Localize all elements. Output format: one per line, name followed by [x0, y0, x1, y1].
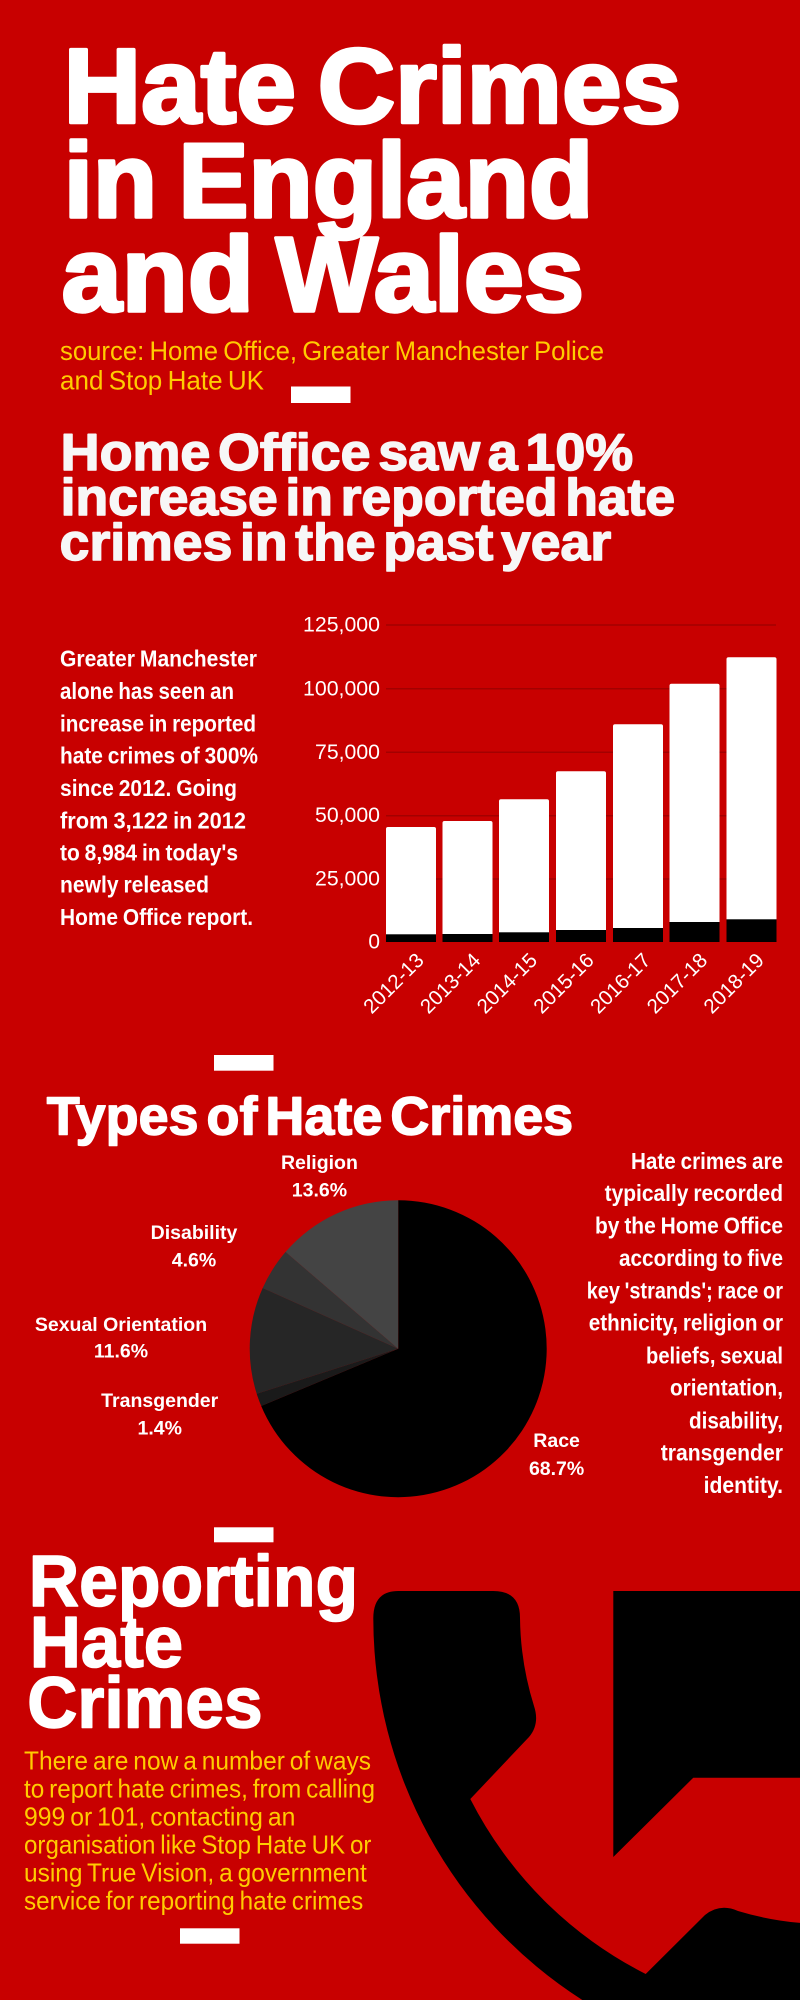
heading: reporting hate crimes	[27, 1542, 358, 1743]
pie labels: Sexual Orientation	[35, 1314, 207, 1336]
text block: greater manchester	[60, 646, 258, 930]
text block: ways to report: to report hate crimes, from calling	[24, 1773, 375, 1803]
text block: strands: disability,	[689, 1407, 783, 1433]
icon: speech bubble	[613, 1591, 800, 1857]
text block: strands	[587, 1148, 783, 1498]
slice: sexual orientation	[250, 1288, 398, 1394]
title: Hate Crimes	[64, 28, 681, 146]
slice: transgender	[257, 1349, 398, 1406]
x axis labels: 2012-13	[359, 949, 429, 1018]
text block: greater manchester: alone has seen an	[60, 678, 234, 704]
text block: greater manchester: to 8,984 in today's	[60, 840, 238, 866]
slice: race	[261, 1200, 547, 1497]
text block: ways to report	[24, 1745, 375, 1915]
x axis labels: 2015-16	[529, 949, 599, 1018]
pie labels: 13.6%	[292, 1180, 347, 1202]
y axis labels: 50,000	[315, 804, 380, 827]
heading: reporting hate crimes: Reporting	[29, 1542, 358, 1622]
pie chart	[250, 1200, 547, 1497]
text block: greater manchester: newly released	[60, 872, 209, 898]
text block: strands: typically recorded	[605, 1180, 783, 1206]
title	[62, 28, 681, 334]
black bar segments	[386, 919, 776, 942]
text block: ways to report: service for reporting hate crimes	[24, 1885, 363, 1915]
heading: reporting hate crimes: Hate	[30, 1603, 183, 1683]
text block: ways to report: There are now a number of ways	[24, 1745, 371, 1775]
y axis labels: 25,000	[315, 867, 380, 890]
slice: disability	[263, 1252, 398, 1349]
heading: reporting hate crimes: Crimes	[27, 1663, 263, 1743]
text block: strands: ethnicity, religion or	[589, 1310, 783, 1336]
text block: strands: transgender	[661, 1440, 783, 1466]
text block: ways to report: 999 or 101, contacting an	[24, 1801, 295, 1831]
x axis labels: 2016-17	[586, 949, 655, 1018]
heading: home office increase: crimes in the past year	[60, 514, 611, 572]
title: and Wales	[62, 216, 584, 334]
x axis labels: 2017-18	[643, 949, 712, 1018]
text block: strands: beliefs, sexual	[646, 1342, 783, 1368]
text block: ways to report: organisation like Stop Hate UK or	[24, 1829, 372, 1859]
y axis labels: 125,000	[303, 614, 380, 637]
y axis labels: 75,000	[315, 741, 380, 764]
x axis labels: 2014-15	[472, 949, 542, 1018]
pie labels: Disability	[151, 1222, 237, 1244]
text block: strands: Hate crimes are	[631, 1148, 783, 1174]
x axis labels: 2013-14	[416, 949, 485, 1018]
x axis labels	[359, 949, 769, 1018]
divider bar	[214, 1527, 274, 1542]
divider bar	[214, 1055, 274, 1071]
heading: types of hate crimes: Types of Hate Crimes	[47, 1086, 573, 1146]
text block: greater manchester: Greater Manchester	[60, 646, 257, 672]
bar chart	[303, 614, 776, 1018]
text block: greater manchester: Home Office report.	[60, 904, 253, 930]
pie labels: Transgender	[101, 1390, 219, 1412]
heading: home office increase: Home Office saw a 10%	[61, 424, 633, 482]
divider bar	[291, 386, 350, 403]
text block: greater manchester: from 3,122 in 2012	[60, 807, 246, 833]
text block: strands: according to five	[619, 1245, 783, 1271]
source line	[60, 336, 604, 396]
heading: home office increase: increase in reported hate	[61, 469, 675, 527]
icon: telephone handset	[373, 1591, 800, 2000]
pie labels: Religion	[281, 1152, 358, 1174]
slice: religion	[286, 1200, 398, 1349]
y axis labels: 0	[368, 930, 380, 953]
text block: strands: by the Home Office	[595, 1213, 783, 1239]
white bars	[386, 657, 776, 942]
pie labels: 68.7%	[529, 1458, 584, 1480]
pie labels: Race	[533, 1430, 580, 1452]
y axis labels	[303, 614, 380, 953]
title: in England	[64, 122, 593, 240]
pie labels: 4.6%	[172, 1250, 216, 1272]
pie labels: 1.4%	[137, 1418, 182, 1440]
text block: greater manchester: increase in reported	[60, 710, 256, 736]
text block: strands: orientation,	[670, 1374, 783, 1400]
source line: and Stop Hate UK	[60, 366, 264, 396]
text block: greater manchester: since 2012. Going	[60, 775, 237, 801]
pie labels: 11.6%	[94, 1341, 148, 1363]
pie labels	[35, 1152, 584, 1480]
text block: strands: identity.	[704, 1472, 783, 1498]
divider bar	[180, 1928, 240, 1944]
source line: source: Home Office, Greater Manchester Police	[60, 336, 604, 366]
heading: home office increase	[60, 424, 675, 572]
y axis labels: 100,000	[303, 677, 380, 700]
text block: greater manchester: hate crimes of 300%	[60, 743, 258, 769]
text block: ways to report: using True Vision, a government	[24, 1857, 368, 1887]
x axis labels: 2018-19	[699, 949, 769, 1018]
